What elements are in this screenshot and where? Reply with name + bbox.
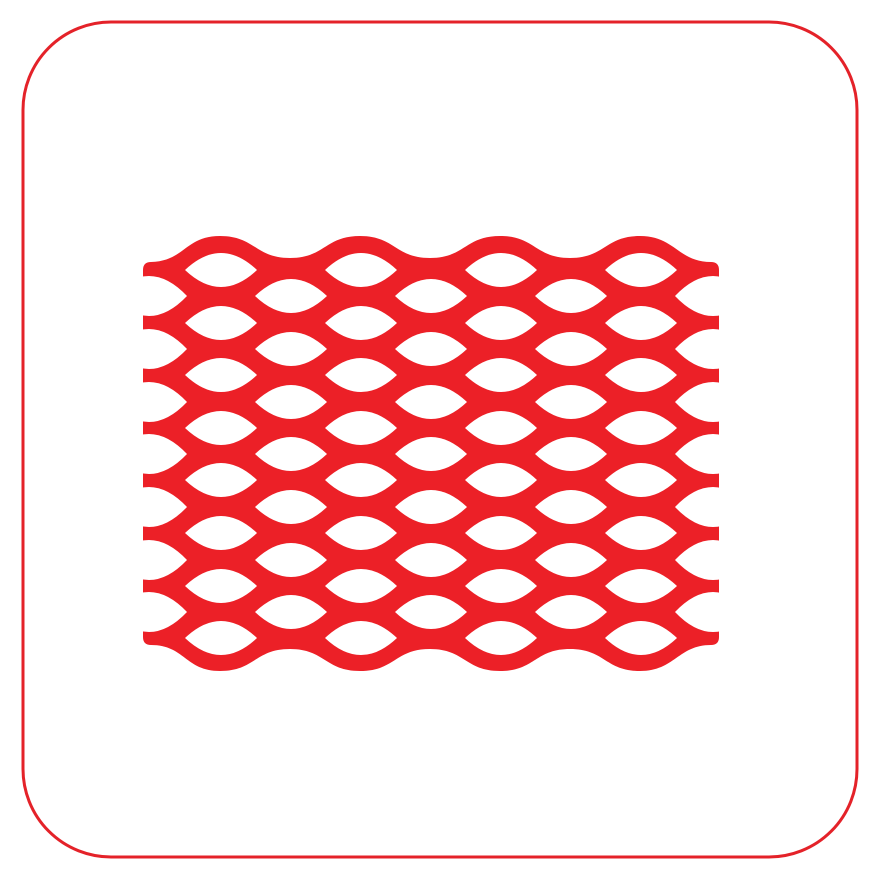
mesh pattern bbox=[111, 236, 751, 671]
